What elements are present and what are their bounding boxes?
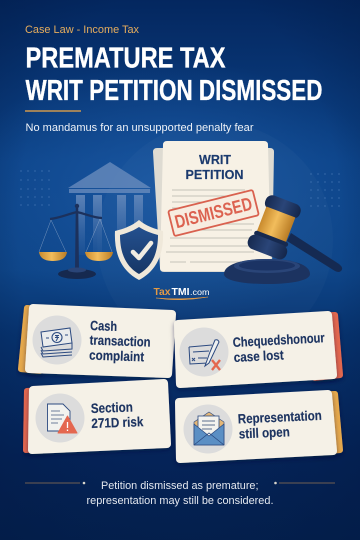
footer ornament left (25, 482, 85, 484)
card text: complaint (89, 348, 145, 364)
title underline (25, 110, 81, 112)
card text (232, 330, 326, 365)
footer ornament right (274, 482, 335, 484)
card body (178, 315, 333, 384)
document heading: PETITION (186, 167, 244, 182)
card text (89, 318, 151, 364)
card: cheque dishonour case lost (178, 315, 340, 384)
icon: courthouse (68, 162, 151, 255)
handle (287, 233, 342, 272)
icon: open envelope with letter (194, 412, 224, 445)
logo: TaxTMI.com: .com (190, 288, 210, 297)
icon: document with warning (48, 404, 77, 433)
icon circle (32, 316, 82, 364)
card text (237, 408, 322, 441)
card text: case lost (233, 347, 285, 365)
back sheet (153, 148, 274, 272)
document: writ petition (153, 141, 274, 272)
card: representation still open (179, 394, 340, 459)
card text: 271D risk (91, 414, 144, 431)
footer conclusion text: representation may still be considered. (86, 495, 274, 507)
document heading: WRIT (199, 152, 231, 167)
card body (29, 308, 172, 374)
card: section 271D risk (26, 383, 167, 450)
document text lines (166, 190, 254, 262)
card text: still open (238, 424, 290, 441)
dot pattern left (20, 170, 50, 206)
icon: cheque with pen and cross (189, 340, 220, 370)
icon: scales of justice (39, 204, 113, 279)
card text: transaction (89, 333, 151, 350)
kicker: case law category: Case Law - Income Tax (25, 24, 139, 36)
card text: Representation (237, 408, 322, 426)
document heading (186, 152, 244, 182)
card body (32, 383, 167, 450)
accent (21, 308, 45, 371)
logo: TaxTMI.com: Tax (154, 286, 171, 298)
stamp: dismissed: DISMISSED (173, 193, 254, 232)
card text: Section (91, 400, 133, 416)
card text: Chequedshonour (232, 330, 326, 350)
icon circle (180, 328, 228, 376)
card text (91, 400, 144, 431)
accent (26, 390, 48, 450)
card: cash transaction complaint (21, 308, 172, 374)
dot pattern right (310, 173, 340, 207)
title (26, 42, 322, 107)
accent (310, 315, 340, 378)
icon: shield with check (115, 220, 163, 280)
sound block (224, 259, 310, 284)
title: PREMATURE TAX (26, 42, 226, 74)
card body (179, 394, 333, 459)
footer conclusion text (86, 480, 274, 507)
icon circle (184, 404, 232, 454)
footer conclusion text: Petition dismissed as premature; (101, 480, 258, 492)
icon circle (36, 394, 84, 442)
accent (310, 394, 340, 452)
icon: banknotes (41, 328, 72, 357)
front sheet (160, 141, 271, 271)
card text: Cash (90, 318, 117, 334)
logo: TaxTMI.com (154, 286, 210, 300)
head (246, 193, 305, 261)
icon: gavel (224, 193, 342, 284)
logo: TaxTMI.com: TMI (172, 286, 190, 298)
subtitle: No mandamus for an unsupported penalty fear (26, 122, 254, 134)
